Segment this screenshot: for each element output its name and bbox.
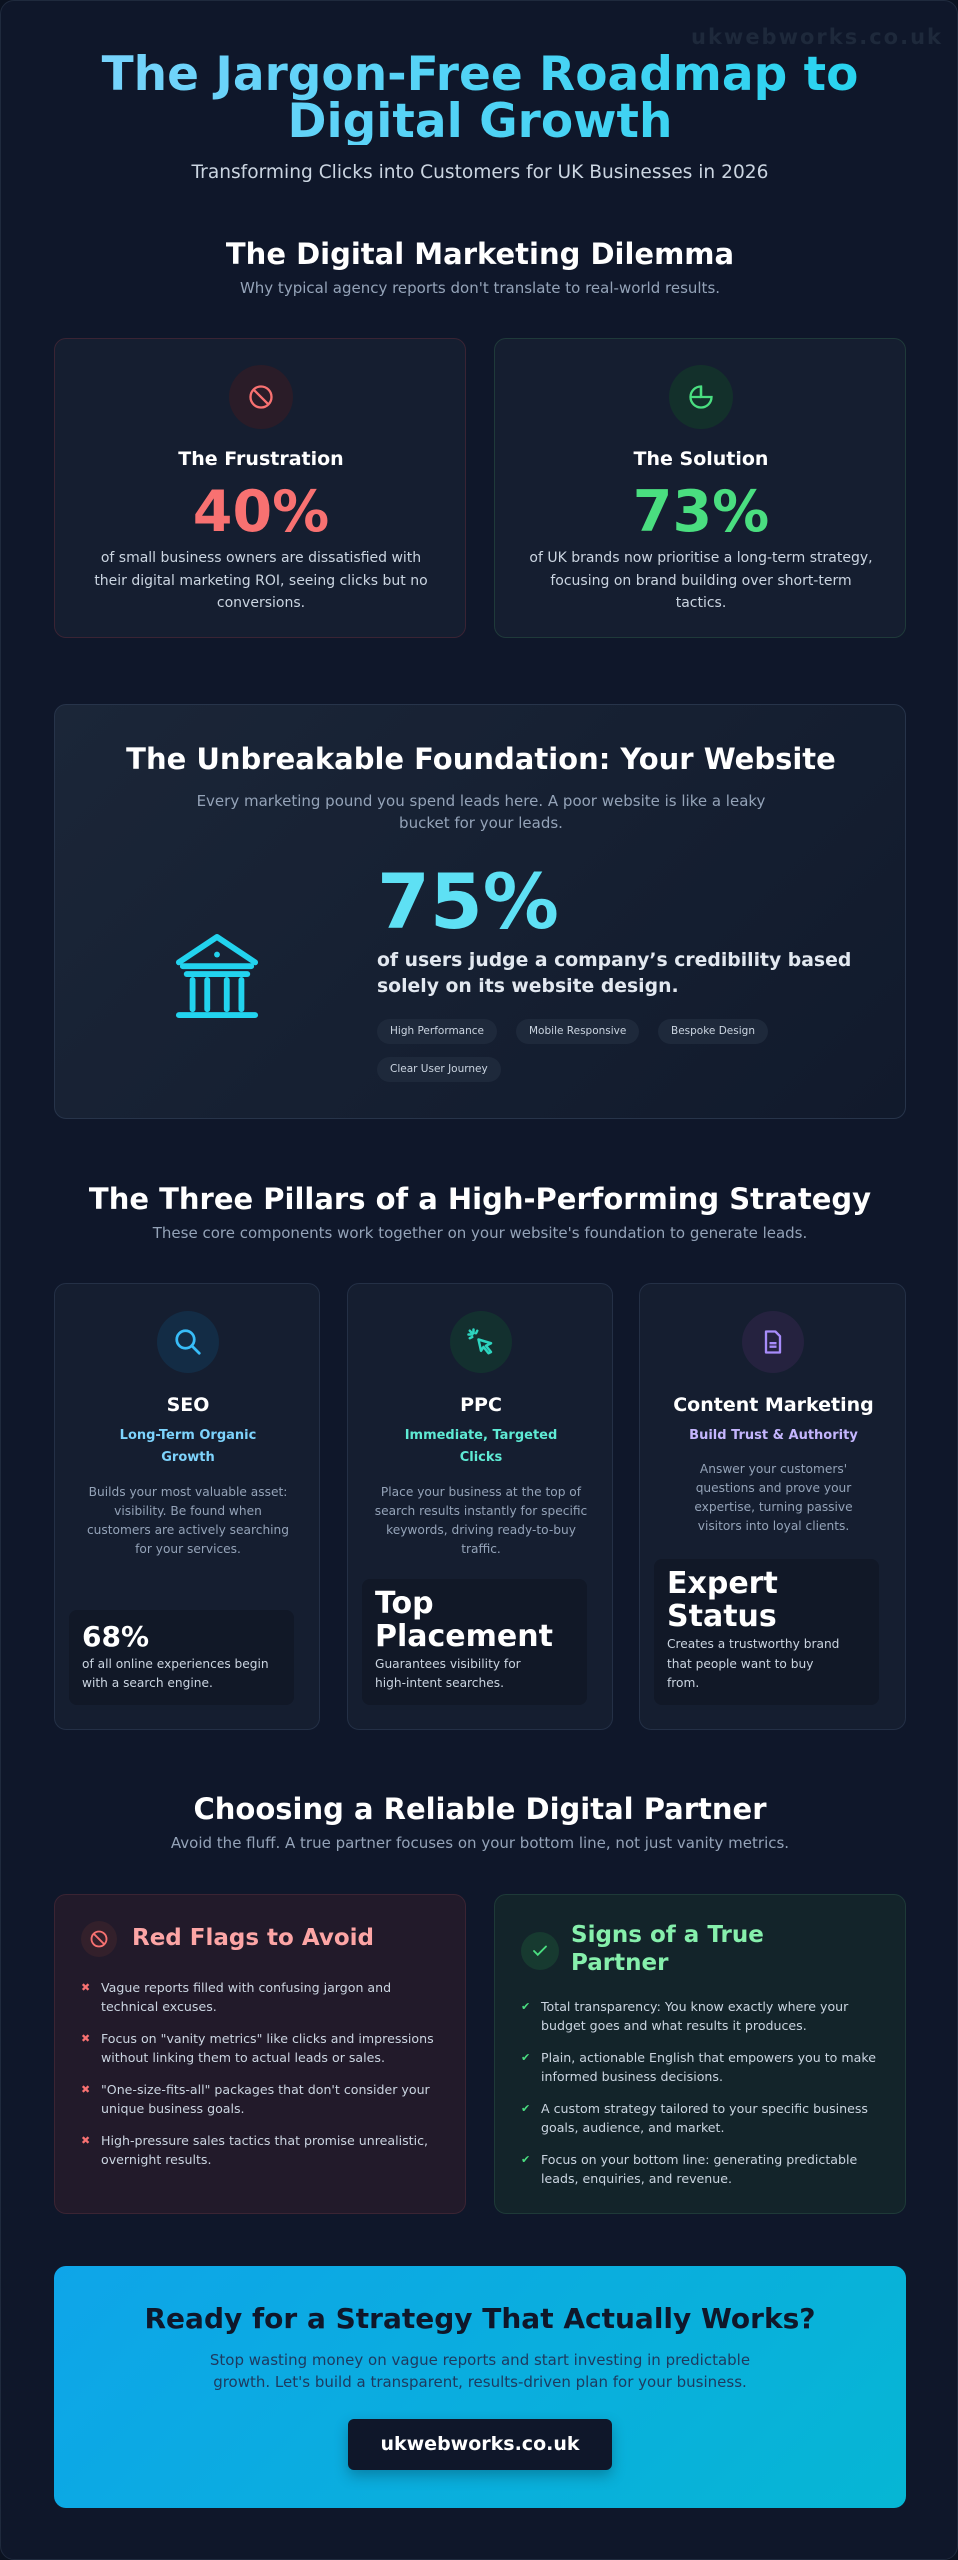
tag: Bespoke Design (671, 1025, 755, 1037)
panel: call to action (54, 2266, 906, 2508)
stat: 40%: 40% (193, 479, 329, 545)
tags (377, 1019, 768, 1082)
button: ukwebworks.co.uk (380, 2433, 580, 2455)
title: true partner (571, 1922, 764, 1976)
heading: CTA: Ready for a Strategy That Actually Works? (144, 2302, 815, 2335)
heading: partner: Choosing a Reliable Digital Partner (193, 1792, 767, 1826)
tag: Clear User Journey (390, 1063, 488, 1075)
icon: prohibited (229, 365, 293, 429)
subheading: pillars: These core components work together on your website's foundation to generate leads. (153, 1224, 807, 1242)
panel: solution (494, 338, 906, 638)
panel: website foundation (54, 704, 906, 1119)
panel: PPC (347, 1283, 613, 1730)
tag: High Performance (390, 1025, 484, 1037)
list: partner signs: Focus on your bottom line: generating predictable leads, enquiries, and revenue. (541, 2152, 857, 2186)
text: SEO: Builds your most valuable asset: visibility. Be found when customers are actively searching for your services. (87, 1485, 289, 1556)
list: partner signs: ✔ (521, 2051, 530, 2064)
text: content: Answer your customers' questions and prove your expertise, turning passive visitors into loyal clients. (694, 1462, 853, 1533)
stat box: 68%: 68% (82, 1620, 149, 1653)
text: foundation sub: Every marketing pound you spend leads here. A poor website is like a leaky bucket for your leads. (197, 792, 765, 832)
subtitle: Transforming Clicks into Customers for UK Businesses in 2026 (192, 162, 768, 183)
stat box: expert status: Creates a trustworthy brand that people want to buy from. (667, 1637, 839, 1690)
title: PPC: PPC (460, 1394, 502, 1416)
list: red flags (81, 1980, 434, 2167)
tag (377, 1057, 501, 1082)
panel: frustration (54, 338, 466, 638)
panel: SEO (54, 1283, 320, 1730)
title: Digital Growth (288, 94, 672, 149)
label: solution: The Solution (634, 448, 768, 470)
text: CTA: Stop wasting money on vague reports and start investing in predictable growth. Let's build a transparent, results-driven plan for your business. (210, 2351, 750, 2391)
list: partner signs: ✔ (521, 2102, 530, 2115)
title: content marketing: Content Marketing (673, 1394, 874, 1416)
heading: pillars: The Three Pillars of a High-Performing Strategy (89, 1182, 871, 1216)
stat box: top placement (362, 1579, 587, 1705)
stat box: expert status: Status (667, 1599, 777, 1634)
subheading: partner: Avoid the fluff. A true partner focuses on your bottom line, not just vanity metrics. (171, 1834, 789, 1852)
panel: true partner (494, 1894, 906, 2214)
stat box: 68% (69, 1610, 294, 1705)
list: red flags: ✖ (81, 2134, 90, 2147)
icon: document (742, 1311, 804, 1373)
list: partner signs (521, 1999, 876, 2186)
list: red flags: Focus on "vanity metrics" like clicks and impressions without linking them to actual leads or sales. (101, 2031, 434, 2065)
title: red flags: Red Flags to Avoid (132, 1925, 374, 1951)
icon: prohibited (81, 1921, 117, 1957)
list: partner signs: ✔ (521, 2153, 530, 2166)
stat: 75%: 75% (377, 857, 559, 946)
list: partner signs: Plain, actionable English that empowers you to make informed business decisions. (541, 2050, 876, 2084)
list: partner signs: A custom strategy tailored to your specific business goals, audience, and market. (541, 2101, 868, 2135)
stat box: expert status (654, 1559, 879, 1705)
heading: dilemma: The Digital Marketing Dilemma (226, 237, 734, 271)
stat: 73%: 73% (633, 479, 769, 545)
title: The Jargon-Free Roadmap to (102, 47, 858, 102)
icon: pie (669, 365, 733, 429)
tag (658, 1019, 768, 1044)
text: solution: of UK brands now prioritise a long-term strategy, focusing on brand building over short-term tactics. (529, 550, 873, 611)
tag (516, 1019, 639, 1044)
list: red flags: "One-size-fits-all" packages that don't consider your unique business goals. (101, 2082, 430, 2116)
stat box: top placement: Guarantees visibility for high-intent searches. (375, 1657, 521, 1690)
button (348, 2419, 612, 2470)
list: partner signs: Total transparency: You know exactly where your budget goes and what results it produces. (541, 1999, 848, 2033)
tag: Mobile Responsive (529, 1025, 626, 1037)
stat box: top placement: Top (375, 1586, 434, 1621)
stat box: top placement: Placement (375, 1619, 553, 1654)
stat box: 68%: of all online experiences begin with a search engine. (82, 1657, 269, 1690)
text: PPC: Place your business at the top of search results instantly for specific keywords, driving ready-to-buy traffic. (375, 1485, 587, 1556)
label: frustration: The Frustration (178, 448, 344, 470)
panel: content marketing (639, 1283, 906, 1730)
subtitle: PPC: Immediate, Targeted Clicks (405, 1428, 557, 1465)
list: red flags: ✖ (81, 2083, 90, 2096)
title: true partner: Signs of a True (571, 1922, 764, 1948)
list: partner signs: ✔ (521, 2000, 530, 2013)
panel: red flags (54, 1894, 466, 2214)
text: 75% description: of users judge a company’s credibility based solely on its website design. (377, 950, 851, 997)
subtitle: SEO: Long-Term Organic Growth (120, 1428, 256, 1465)
title: SEO: SEO (167, 1394, 209, 1416)
stat box: expert status: Expert (667, 1566, 778, 1601)
title: true partner: Partner (571, 1950, 668, 1976)
list: red flags: Vague reports filled with confusing jargon and technical excuses. (101, 1980, 391, 2014)
heading: foundation: The Unbreakable Foundation: Your Website (126, 742, 836, 776)
watermark: ukwebworks.co.uk (691, 25, 943, 49)
tag (377, 1019, 497, 1044)
subheading: dilemma: Why typical agency reports don't translate to real-world results. (240, 279, 720, 297)
list: red flags: ✖ (81, 2032, 90, 2045)
list: red flags: ✖ (81, 1981, 90, 1994)
subtitle: content: Build Trust & Authority (689, 1428, 858, 1443)
icon: search (157, 1311, 219, 1373)
icon: building (176, 934, 258, 1018)
title (41, 51, 919, 145)
list: red flags: High-pressure sales tactics that promise unrealistic, overnight results. (101, 2133, 428, 2167)
icon: check (521, 1932, 559, 1970)
icon: cursor click (450, 1311, 512, 1373)
text: frustration: of small business owners are dissatisfied with their digital marketing ROI, seeing clicks but no conversions. (94, 550, 428, 611)
